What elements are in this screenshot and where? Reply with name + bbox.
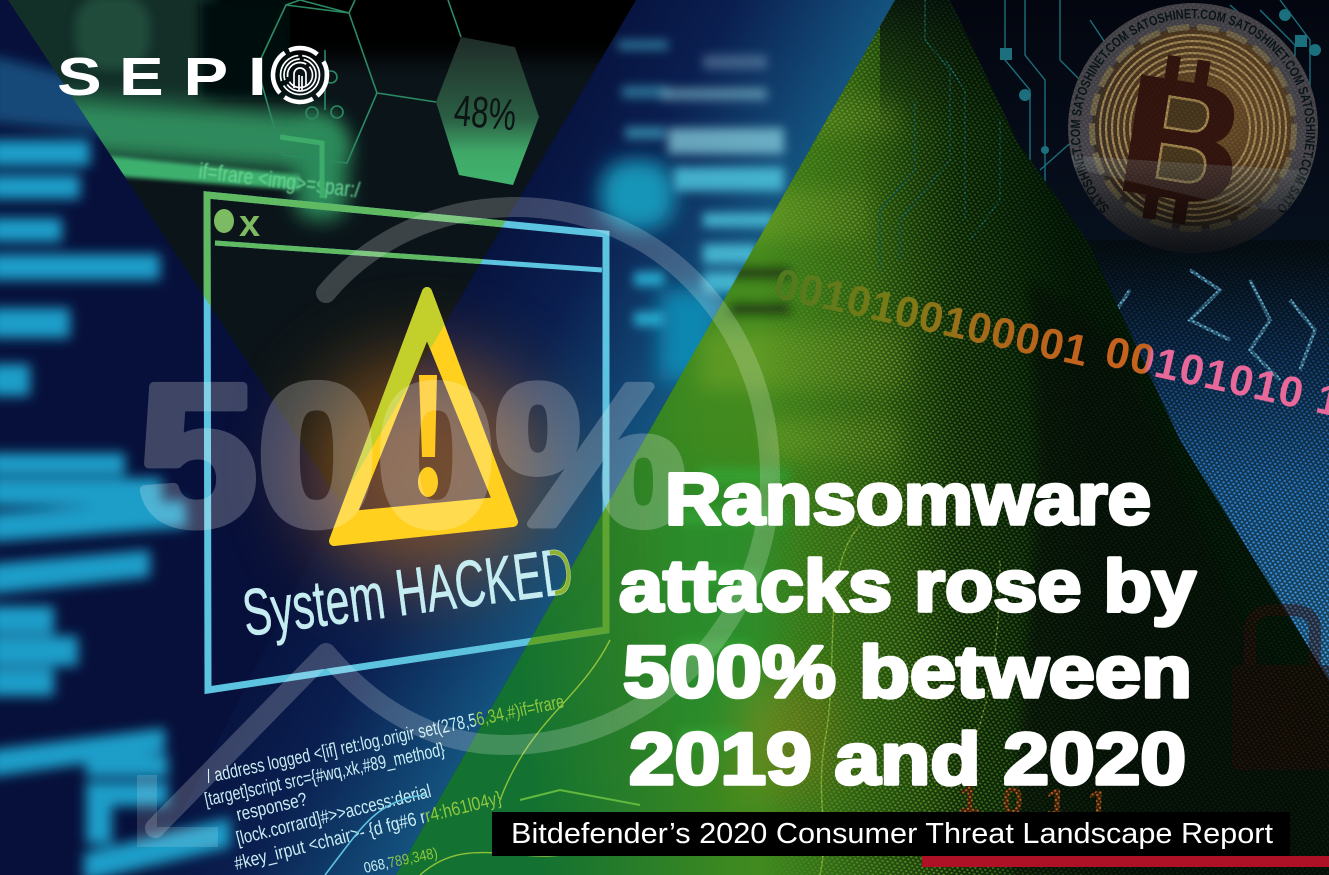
source banner (492, 812, 1290, 856)
panel: blurred cyan code lines, left (0, 55, 230, 875)
panel: blue top-right triangle with circuit (950, 0, 1329, 680)
bitcoin B glyph (1122, 54, 1234, 224)
orange digits behind headline: 1011 (958, 779, 1109, 826)
text: code snippets: response? (234, 789, 309, 826)
text: code snippets: #key_irput <chair>- {d fg#6 rr4:h61l04y} (232, 788, 504, 875)
window buttons (214, 203, 260, 245)
panel: dark inverted triangle (0, 0, 670, 502)
text: 500% watermark: 500% (138, 344, 686, 567)
text: code snippets (203, 691, 566, 875)
icon: warning triangle (334, 292, 513, 541)
icon: filled hexagon 48% (436, 37, 539, 185)
curve: cyan wire (325, 795, 425, 875)
icon: circular arrow watermark (147, 207, 770, 837)
panel: hacked window (207, 195, 606, 690)
warning glow (305, 355, 545, 585)
heading: 500% between (623, 632, 1192, 713)
window frame, green overlap (204, 191, 506, 307)
heading: 2019 and 2020 (629, 719, 1186, 800)
window frame, lower-right green (527, 500, 610, 646)
text: code snippets: / address logged <[if] ret:log.origir set(278,56,34,#)if=frare (205, 691, 566, 788)
icon: lock in red (1232, 610, 1329, 770)
icon: hexagon outlines (257, 0, 461, 163)
panel: green diagonal field (396, 0, 1329, 875)
panel: mid blue blurred code region (150, 0, 895, 875)
window buttons: x (239, 203, 260, 245)
text: System HACKED: System HACKED (238, 533, 577, 650)
icon: filled hexagon 48%: 48% (452, 86, 518, 140)
window frame, cyan (207, 195, 606, 690)
green circuit square accent (280, 137, 322, 198)
source banner: Bitdefender’s 2020 Consumer Threat Landscape Report (511, 818, 1273, 850)
text: code snippets: [lock.corrard]#>>access:derial (234, 781, 433, 850)
logo: SEPIO (57, 38, 337, 112)
heading: attacks rose by (619, 546, 1196, 627)
heading: Ransomware (665, 459, 1151, 540)
bitcoin B glyph: B (1109, 41, 1255, 240)
blurred code text, green: if=frare <img>=spar:/ (197, 158, 362, 203)
red accent bar (922, 856, 1329, 867)
icon: bitcoin coin (1068, 3, 1318, 253)
logo wordmark: SEPI (57, 46, 267, 107)
text: code snippets: [target]script src={#wq,xk,#89_method} (203, 739, 447, 811)
binary text, green and orange part: 0010100100001 (770, 260, 1093, 376)
logo fingerprint icon (263, 38, 337, 112)
B counters (1157, 97, 1215, 185)
heading (619, 459, 1196, 800)
halftone overlay (760, 0, 1329, 875)
